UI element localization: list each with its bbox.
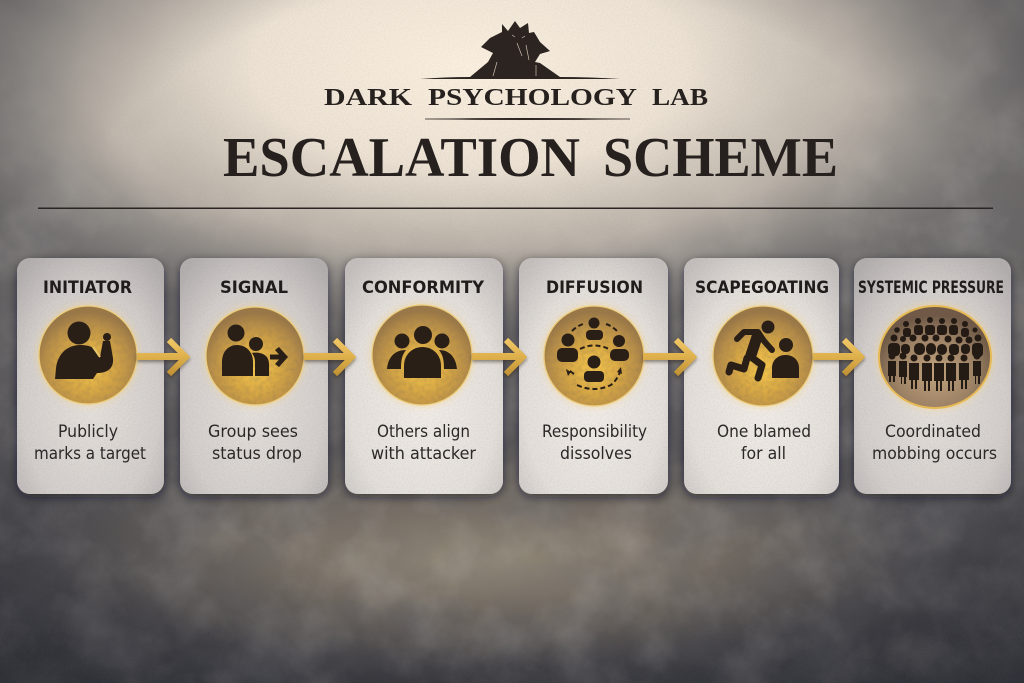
description: diffusion [542, 422, 647, 463]
description: signal: status drop [212, 444, 302, 463]
panel: diffusion [519, 258, 668, 494]
description: conformity: with attacker [371, 444, 476, 463]
brand name: PSYCHOLOGY [428, 85, 637, 111]
brand name: DARK [324, 85, 412, 111]
description: scapegoating: for all [741, 444, 786, 463]
panel: scapegoating [684, 258, 839, 494]
title rule [38, 208, 993, 209]
description: scapegoating: One blamed [717, 422, 811, 441]
brand name [324, 85, 708, 111]
icon: group of three [372, 305, 472, 405]
description: scapegoating [717, 422, 811, 463]
heading: conformity: CONFORMITY [362, 278, 485, 298]
icon: circulating responsibility [544, 306, 644, 406]
arrow: diffusion to scapegoating [643, 340, 693, 374]
panel: initiator [17, 258, 164, 494]
description: diffusion: dissolves [560, 444, 632, 463]
heading: initiator: INITIATOR [43, 278, 132, 298]
arrow: signal to conformity [304, 340, 352, 374]
panel: conformity [345, 258, 503, 494]
description: systemic pressure [872, 422, 997, 463]
description: signal: Group sees [208, 422, 298, 441]
arrow: scapegoating to systemic pressure [813, 340, 861, 374]
description: initiator: marks a target [34, 444, 146, 463]
panel: signal [180, 258, 328, 494]
description: initiator [34, 422, 146, 463]
title [223, 127, 838, 189]
heading: signal: SIGNAL [220, 278, 288, 298]
title: ESCALATION [223, 127, 580, 189]
description: diffusion: Responsibility [542, 422, 647, 441]
description: systemic pressure: Coordinated [885, 422, 981, 441]
arrow: initiator to signal [137, 340, 186, 374]
heading: scapegoating: SCAPEGOATING [695, 278, 829, 298]
logo: three-headed wolf [420, 21, 620, 79]
title: SCHEME [603, 127, 838, 189]
brand name: LAB [652, 85, 708, 111]
description: systemic pressure: mobbing occurs [872, 444, 997, 463]
divider under brand [425, 118, 630, 120]
icon: runner and blamed person [713, 306, 813, 406]
heading: diffusion: DIFFUSION [546, 278, 643, 298]
icon: person and bystander with arrow [206, 307, 304, 405]
description: signal [208, 422, 302, 463]
description: conformity: Others align [377, 422, 470, 441]
description: initiator: Publicly [58, 422, 118, 441]
description: conformity [371, 422, 476, 463]
icon: crowd [879, 306, 991, 408]
panel: systemic pressure [854, 258, 1011, 494]
icon: person pointing [39, 306, 137, 404]
arrow: conformity to diffusion [472, 340, 523, 374]
